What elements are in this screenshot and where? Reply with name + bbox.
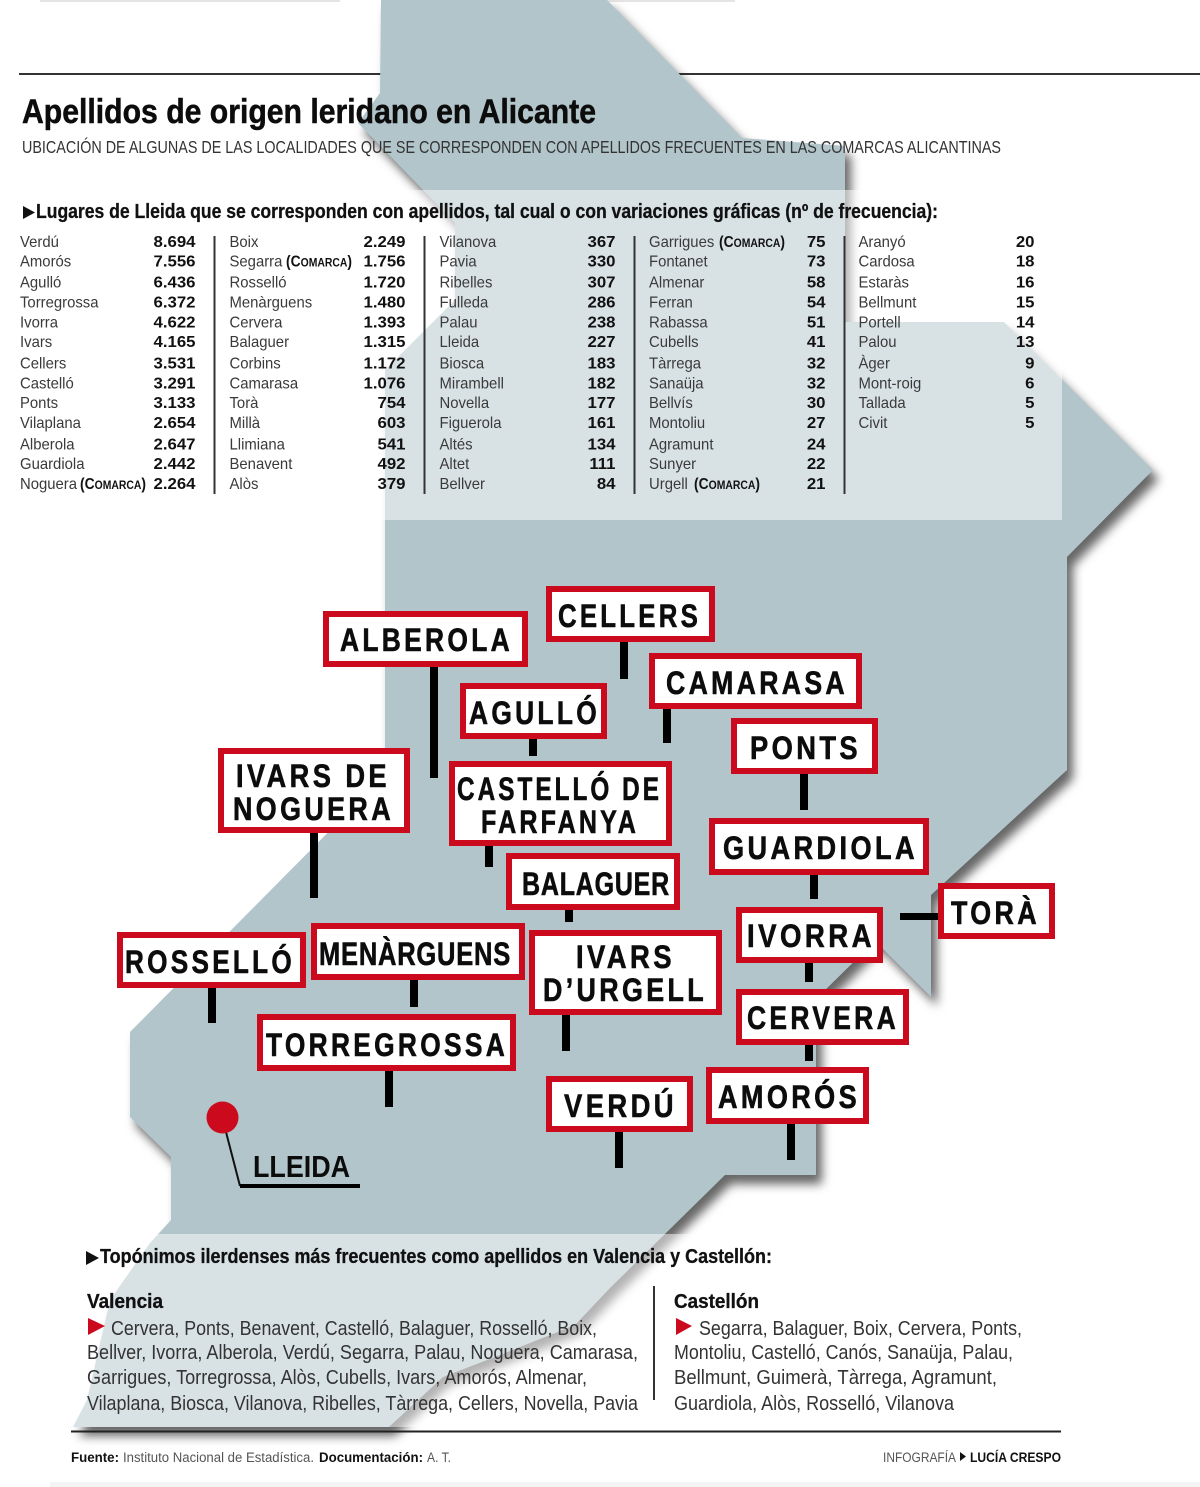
sign: Amorós bbox=[709, 1070, 866, 1160]
list column 5: 20 bbox=[1016, 233, 1034, 251]
sign: Torà bbox=[900, 886, 1052, 936]
sign: Cervera: CERVERA bbox=[747, 1000, 899, 1036]
list column 2: Balaguer bbox=[230, 334, 289, 351]
list column 2: 2.249 bbox=[363, 233, 406, 251]
list column 1: Cellers bbox=[20, 355, 67, 373]
list column 2: 603 bbox=[377, 414, 406, 432]
list column 3: Biosca bbox=[440, 355, 485, 373]
text block: Castellón: Bellmunt, Guimerà, Tàrrega, Agramunt, bbox=[674, 1367, 997, 1389]
sign: Ivorra bbox=[739, 910, 880, 982]
sign: Guardiola bbox=[712, 821, 926, 899]
list column 4: Sunyer bbox=[649, 456, 696, 473]
list column 1: 2.654 bbox=[153, 414, 196, 432]
list column 2: Corbins bbox=[230, 355, 281, 373]
credit: LUCÍA CRESPO bbox=[970, 1450, 1061, 1465]
list column 2: 754 bbox=[377, 394, 406, 412]
list column 3: Lleida bbox=[440, 334, 480, 351]
list column 4: Urgell bbox=[649, 476, 688, 493]
marker: Lleida: LLEIDA bbox=[253, 1149, 350, 1184]
list column 3: Mirambell bbox=[440, 375, 504, 393]
list column 4: (COMARCA) bbox=[719, 234, 785, 251]
list column 2: (COMARCA) bbox=[286, 254, 352, 270]
list column 3: 227 bbox=[587, 334, 616, 351]
sign: Ivars d'Urgell: IVARS bbox=[576, 939, 675, 975]
sign: Torregrossa bbox=[260, 1017, 513, 1107]
list column 3: Figuerola bbox=[440, 415, 502, 432]
list column 4: 54 bbox=[807, 294, 826, 311]
list column 1: 6.436 bbox=[153, 274, 196, 292]
sign: Torregrossa: TORREGROSSA bbox=[266, 1027, 508, 1063]
sign: Balaguer bbox=[509, 856, 677, 922]
list column 5: Portell bbox=[858, 314, 901, 331]
list column 1: 8.694 bbox=[153, 233, 196, 251]
list column 2: 492 bbox=[377, 456, 406, 473]
list column 3: 238 bbox=[587, 314, 616, 331]
sign: Alberola: ALBEROLA bbox=[340, 622, 513, 658]
list column 5: 15 bbox=[1016, 294, 1034, 311]
list column 1: Ponts bbox=[20, 395, 58, 412]
list column 5: 5 bbox=[1025, 414, 1034, 432]
text block: Valencia bbox=[87, 1291, 639, 1415]
list column 2: 1.756 bbox=[363, 253, 406, 270]
list column 4: Bellvís bbox=[649, 395, 693, 412]
list column 2: 541 bbox=[377, 436, 406, 453]
panel: surname frequency list bbox=[20, 201, 1035, 494]
sign: Menàrguens: MENÀRGUENS bbox=[319, 936, 511, 972]
list column 4: Garrigues bbox=[649, 234, 715, 251]
sign: Ivorra: IVORRA bbox=[747, 918, 875, 954]
list column 1: (COMARCA) bbox=[80, 476, 146, 493]
list column 2: 1.393 bbox=[363, 314, 406, 331]
list column 2: 1.315 bbox=[363, 334, 406, 351]
list column 4: 22 bbox=[807, 456, 826, 473]
list column 5: 9 bbox=[1025, 355, 1034, 373]
list column 3: 161 bbox=[587, 414, 616, 432]
list column 4: Almenar bbox=[649, 274, 704, 292]
list column 2: Boix bbox=[230, 234, 259, 251]
source line: Fuente: bbox=[71, 1450, 119, 1465]
list column 2: 379 bbox=[377, 475, 406, 493]
sign: Alberola bbox=[326, 614, 525, 778]
list column 4: 21 bbox=[807, 475, 826, 493]
list column 3 bbox=[440, 233, 616, 493]
sign: Ivars de Noguera bbox=[221, 751, 407, 898]
list column 2: Millà bbox=[230, 415, 260, 432]
list column 3: 134 bbox=[587, 436, 616, 453]
list column 5: Palou bbox=[858, 334, 897, 351]
sign: Ivars de Noguera: NOGUERA bbox=[233, 791, 394, 827]
panel: bottom background bbox=[30, 1234, 1050, 1427]
title: Apellidos de origen leridano en Alicante bbox=[22, 93, 596, 131]
source line: A. T. bbox=[427, 1450, 451, 1465]
text block: Valencia: Valencia bbox=[87, 1291, 164, 1313]
list heading: Lugares de Lleida que se corresponden con apellidos, tal cual o con variaciones gráficas (nº de frecuencia): bbox=[36, 201, 938, 223]
sign: Ivars d'Urgell: D’URGELL bbox=[543, 972, 707, 1008]
text block: Valencia: Cervera, Ponts, Benavent, Castelló, Balaguer, Rosselló, Boix, bbox=[111, 1318, 597, 1340]
list column 2: Alòs bbox=[230, 476, 259, 493]
list column 1: Ivorra bbox=[20, 314, 58, 331]
list column 4: Rabassa bbox=[649, 314, 708, 331]
list column 1: Noguera bbox=[20, 476, 77, 493]
list column 4: Montoliu bbox=[649, 415, 705, 432]
list column 2: Benavent bbox=[230, 456, 293, 473]
list column 4: Ferran bbox=[649, 294, 693, 312]
list column 2 bbox=[230, 233, 406, 493]
list column 5: Mont-roig bbox=[858, 375, 921, 393]
list column 5: Aranyó bbox=[858, 234, 906, 251]
list column 1 bbox=[20, 233, 196, 493]
list column 1: 2.647 bbox=[153, 436, 196, 453]
list column 5: Bellmunt bbox=[858, 294, 917, 312]
list column 2: 1.172 bbox=[363, 355, 406, 373]
sign: Camarasa bbox=[652, 656, 859, 743]
text block: Castellón: Segarra, Balaguer, Boix, Cervera, Ponts, bbox=[699, 1318, 1022, 1340]
list column 1: 7.556 bbox=[153, 253, 196, 270]
list column 4: 24 bbox=[807, 436, 826, 453]
sign: Rosselló bbox=[120, 935, 303, 1023]
list column 1: Verdú bbox=[20, 234, 59, 251]
list column 3: 177 bbox=[587, 394, 616, 412]
list column 5: Tallada bbox=[858, 395, 906, 412]
sign: Castelló de Farfanya: CASTELLÓ DE bbox=[457, 771, 662, 807]
list column 1: Amorós bbox=[20, 253, 71, 271]
list column 5: 14 bbox=[1016, 314, 1035, 331]
list column 1: 4.165 bbox=[153, 334, 196, 351]
list column 1: 6.372 bbox=[153, 294, 196, 311]
list column 4: 30 bbox=[807, 394, 826, 412]
sign: Verdú bbox=[549, 1079, 690, 1168]
list column 3: 286 bbox=[587, 294, 616, 311]
panel: list background bbox=[0, 190, 1062, 520]
text block: Castellón: Castellón bbox=[674, 1291, 759, 1313]
sign: Cervera bbox=[739, 992, 906, 1061]
text block: Castellón: Montoliu, Castelló, Canós, Sanaüja, Palau, bbox=[674, 1342, 1013, 1364]
list column 1: Guardiola bbox=[20, 456, 85, 473]
list column 1: 2.442 bbox=[153, 456, 196, 473]
list column 3: Fulleda bbox=[440, 294, 489, 312]
list column 4 bbox=[649, 233, 826, 493]
list column 5: 16 bbox=[1016, 274, 1034, 292]
credit: INFOGRAFÍA bbox=[883, 1450, 956, 1465]
list column 1: 2.264 bbox=[153, 475, 196, 493]
list column 1: 3.291 bbox=[153, 375, 196, 392]
list column 4: 75 bbox=[807, 233, 826, 251]
bottom heading: Topónimos ilerdenses más frecuentes como apellidos en Valencia y Castellón: bbox=[100, 1246, 772, 1268]
list column 2: Camarasa bbox=[230, 375, 298, 393]
marker: Lleida bbox=[206, 1102, 360, 1188]
list column 2: 1.480 bbox=[363, 294, 406, 311]
list column 5: 5 bbox=[1025, 394, 1034, 412]
list column 1: Castelló bbox=[20, 375, 74, 393]
list column 1: 3.133 bbox=[153, 394, 196, 412]
sign: Rosselló: ROSSELLÓ bbox=[125, 944, 295, 980]
list column 3: Vilanova bbox=[440, 234, 497, 251]
list column 3: 183 bbox=[587, 355, 616, 373]
list column 1: 4.622 bbox=[153, 314, 196, 331]
source line: Instituto Nacional de Estadística. bbox=[123, 1450, 314, 1465]
sign: Cellers: CELLERS bbox=[558, 598, 701, 634]
list column 3: Palau bbox=[440, 314, 478, 331]
sign: Castelló de Farfanya bbox=[452, 764, 669, 867]
list column 3: Ribelles bbox=[440, 274, 493, 292]
list column 4: 58 bbox=[807, 274, 826, 292]
panel: Valencia and Castellón bbox=[86, 1246, 1022, 1415]
list column 4: (COMARCA) bbox=[694, 476, 760, 493]
list column 5: Cardosa bbox=[858, 253, 915, 271]
list column 2: Torà bbox=[230, 395, 259, 412]
list column 4: Cubells bbox=[649, 334, 699, 351]
sign: Verdú: VERDÚ bbox=[564, 1088, 677, 1124]
list column 1: Torregrossa bbox=[20, 294, 99, 312]
source line: Documentación: bbox=[319, 1450, 423, 1465]
list column 5: 18 bbox=[1016, 253, 1034, 270]
list column 4: 32 bbox=[807, 355, 826, 373]
sign: Agulló bbox=[463, 686, 604, 756]
list column 1: Alberola bbox=[20, 436, 75, 453]
sign: Ponts: PONTS bbox=[750, 730, 861, 766]
list column 4: 73 bbox=[807, 253, 826, 270]
list column 4: 27 bbox=[807, 414, 826, 432]
list column 4: Sanaüja bbox=[649, 375, 704, 393]
list column 5: 13 bbox=[1016, 334, 1034, 351]
list column 5: 6 bbox=[1025, 375, 1034, 392]
list column 3: 330 bbox=[587, 253, 616, 270]
list column 1: Agulló bbox=[20, 274, 61, 292]
list column 1: 3.531 bbox=[153, 355, 196, 373]
list column 4: Fontanet bbox=[649, 253, 708, 271]
list column 2: Segarra bbox=[230, 253, 283, 271]
list column 1: Vilaplana bbox=[20, 415, 81, 432]
list column 4: 41 bbox=[807, 334, 826, 351]
sign: Castelló de Farfanya: FARFANYA bbox=[481, 804, 639, 840]
list column 3: Pavia bbox=[440, 253, 477, 271]
list column 4: 51 bbox=[807, 314, 826, 331]
list column 3: Novella bbox=[440, 395, 489, 412]
text block: Castellón: Guardiola, Alòs, Rosselló, Vilanova bbox=[674, 1393, 955, 1415]
text block: Castellón bbox=[674, 1291, 1022, 1415]
list column 1: Ivars bbox=[20, 334, 52, 351]
list column 3: Altés bbox=[440, 436, 473, 453]
list column 2: 1.720 bbox=[363, 274, 406, 292]
sign: Cellers bbox=[549, 589, 712, 679]
credit bbox=[883, 1450, 1061, 1465]
list column 2: Rosselló bbox=[230, 274, 287, 292]
subtitle: UBICACIÓN DE ALGUNAS DE LAS LOCALIDADES QUE SE CORRESPONDEN CON APELLIDOS FRECUENTES EN LAS COMARCAS ALICANTINAS bbox=[22, 136, 1001, 157]
sign: Guardiola: GUARDIOLA bbox=[723, 830, 918, 866]
list column 2: Cervera bbox=[230, 314, 283, 331]
list column 3: Bellver bbox=[440, 476, 485, 493]
sign: Ponts bbox=[734, 721, 875, 810]
list column 3: 84 bbox=[597, 475, 616, 493]
list column 4: Agramunt bbox=[649, 436, 714, 453]
list column 3: 111 bbox=[589, 456, 616, 473]
sign: Ivars de Noguera: IVARS DE bbox=[236, 758, 390, 794]
sign: Camarasa: CAMARASA bbox=[666, 665, 848, 701]
sign: Torà: TORÀ bbox=[951, 895, 1040, 931]
sign: Balaguer: BALAGUER bbox=[522, 866, 670, 902]
list column 2: 1.076 bbox=[363, 375, 406, 392]
list column 5: Estaràs bbox=[858, 274, 909, 292]
sign: Amorós: AMORÓS bbox=[718, 1079, 860, 1115]
list column 3: Altet bbox=[440, 456, 470, 473]
text block: Valencia: Garrigues, Torregrossa, Alòs, Cubells, Ivars, Amorós, Almenar, bbox=[87, 1367, 587, 1389]
list column 2: Llimiana bbox=[230, 436, 285, 453]
list column 5: Àger bbox=[858, 355, 890, 373]
list column 4: 32 bbox=[807, 375, 826, 392]
text block: Valencia: Vilaplana, Biosca, Vilanova, Ribelles, Tàrrega, Cellers, Novella, Pavia bbox=[87, 1393, 639, 1415]
list column 3: 182 bbox=[587, 375, 616, 392]
sign: Agulló: AGULLÓ bbox=[469, 695, 600, 731]
list column 4: Tàrrega bbox=[649, 355, 701, 373]
list column 5 bbox=[858, 233, 1035, 432]
list column 2: Menàrguens bbox=[230, 294, 312, 312]
sign: Ivars d'Urgell bbox=[532, 933, 719, 1051]
source line bbox=[71, 1450, 451, 1465]
list column 5: Civit bbox=[858, 415, 888, 432]
sign: Menàrguens bbox=[314, 926, 522, 1007]
list column 3: 367 bbox=[587, 233, 616, 251]
list column 3: 307 bbox=[587, 274, 616, 292]
text block: Valencia: Bellver, Ivorra, Alberola, Verdú, Segarra, Palau, Noguera, Camarasa, bbox=[87, 1342, 638, 1364]
